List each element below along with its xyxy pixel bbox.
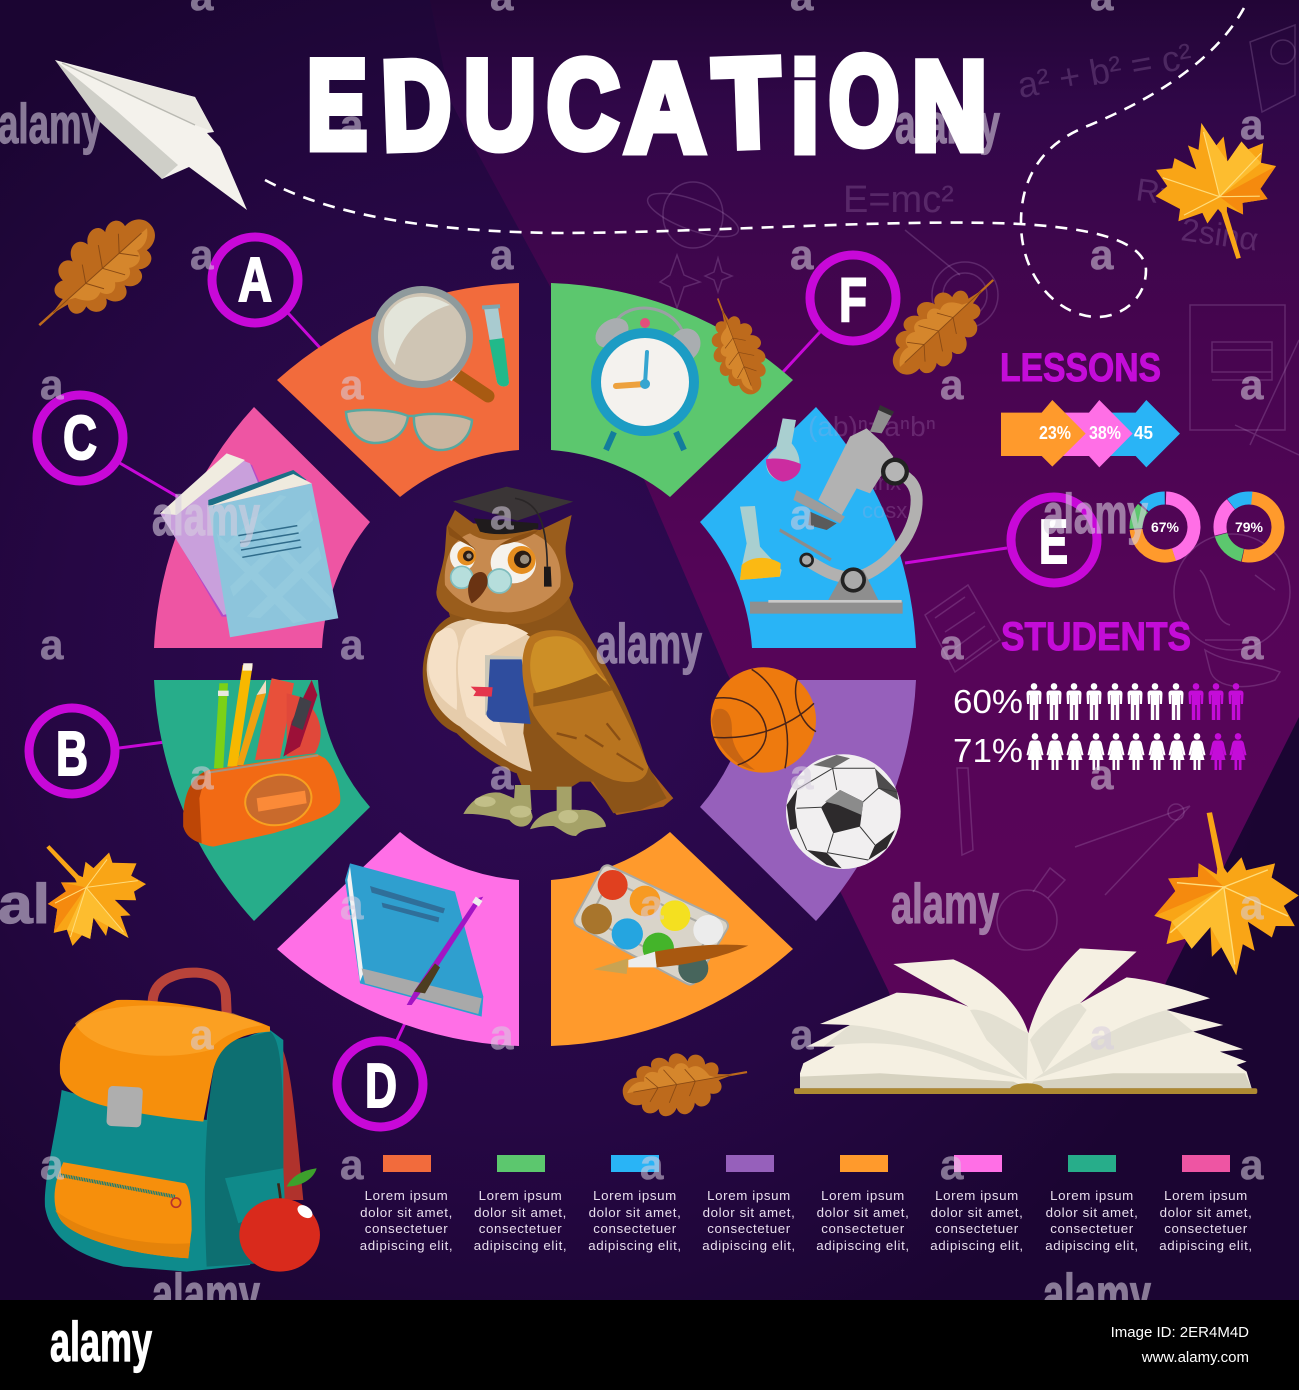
watermarks: a [640, 1141, 664, 1188]
watermarks: a [490, 231, 514, 278]
chart: students female row 71% [953, 732, 1246, 770]
icon: notebooks [160, 453, 338, 637]
chart: students male row 60%: 60% [953, 683, 1023, 720]
title: U [464, 36, 536, 175]
watermarks: a [340, 1141, 364, 1188]
legend item orange-red: Lorem ipsum [365, 1188, 448, 1203]
watermarks: a [1090, 751, 1114, 798]
title: C [545, 34, 621, 175]
watermarks: a [1240, 621, 1264, 668]
legend item blue: Lorem ipsum [593, 1188, 677, 1203]
icon: magnifying glass [371, 286, 488, 396]
chalk doodles background: R= [1134, 171, 1180, 213]
watermarks: a [790, 231, 814, 278]
legend item blue: adipiscing elit, [588, 1238, 682, 1253]
legend item teal: adipiscing elit, [1045, 1238, 1139, 1253]
label ring C: C [63, 404, 97, 473]
watermarks: a [40, 621, 64, 668]
panel: segment orange [551, 832, 793, 1046]
icon: microscope and flasks [740, 405, 917, 614]
watermarks: a [40, 361, 64, 408]
label ring F: F [839, 266, 867, 335]
chart: donut 67% [1124, 486, 1206, 568]
legend item purple: consectetuer [707, 1221, 791, 1236]
watermarks: alamy [0, 92, 102, 155]
icon: blue book [345, 863, 483, 1017]
legend item teal: dolor sit amet, [1046, 1205, 1138, 1220]
icon: oak leaf on clock panel [694, 289, 778, 403]
panel: segment D magenta [277, 832, 519, 1046]
legend item green: adipiscing elit, [474, 1238, 567, 1253]
legend item magenta: Lorem ipsum [935, 1188, 1019, 1203]
label ring B [29, 708, 115, 794]
chart: donut 67%: 67% [1151, 519, 1180, 535]
panel: segment C pink [154, 407, 370, 648]
watermarks: a [40, 1141, 64, 1188]
label ring E [1011, 497, 1097, 583]
label ring F [810, 255, 896, 341]
watermarks: a [940, 361, 964, 408]
label ring A [212, 237, 298, 323]
owl book [485, 655, 530, 723]
watermarks: a [1240, 1141, 1264, 1188]
owl eyes [450, 541, 475, 571]
chart: donut 79%: 79% [1235, 519, 1264, 535]
watermarks: a [790, 751, 814, 798]
watermarks: a [1240, 101, 1264, 148]
doodle formula over blue panel: sinx [862, 470, 901, 495]
owl glasses [451, 566, 473, 588]
legend item blue [588, 1155, 682, 1253]
legend item orange-red: dolor sit amet, [360, 1205, 453, 1220]
icon: oak leaf top left [15, 198, 175, 352]
stock photo footer bar: www.alamy.com [1141, 1349, 1249, 1366]
icon: maple leaf top right [1141, 108, 1296, 274]
chalk doodles background: E=mc² [843, 179, 954, 221]
title [307, 32, 987, 178]
watermarks: a [340, 621, 364, 668]
watermarks: a [1240, 881, 1264, 928]
legend item blue: consectetuer [593, 1221, 677, 1236]
watermarks: alamy [891, 872, 999, 935]
legend item teal: Lorem ipsum [1050, 1188, 1134, 1203]
chalk doodles background: a² + b² = c² [1014, 35, 1195, 106]
watermarks: a [1090, 1011, 1114, 1058]
legend item green: Lorem ipsum [479, 1188, 562, 1203]
owl legs and feet [463, 785, 606, 836]
legend item pink: Lorem ipsum [1164, 1188, 1248, 1203]
legend item orange [816, 1155, 910, 1253]
doodle formula over blue panel: (ab)ⁿ=aⁿbⁿ [808, 411, 936, 442]
watermarks: a [190, 751, 214, 798]
watermarks: a [940, 1141, 964, 1188]
watermarks: a [190, 1011, 214, 1058]
panel: segment E blue [700, 407, 916, 648]
legend item pink: adipiscing elit, [1159, 1238, 1253, 1253]
watermarks: a [1090, 231, 1114, 278]
watermarks: a [940, 621, 964, 668]
panel: segment F green [551, 283, 793, 497]
stock photo footer bar: Image ID: 2ER4M4D [1111, 1324, 1249, 1341]
label ring E: E [1039, 508, 1068, 577]
icon: oak leaf right [875, 256, 1015, 394]
watermarks: a [790, 491, 814, 538]
icon: test tube [482, 304, 509, 386]
panel: segment B teal [154, 680, 370, 921]
watermarks: alamy [895, 92, 1000, 155]
owl head [436, 510, 573, 624]
chart: donut 79% [1208, 486, 1290, 568]
chalk doodles background [643, 25, 1299, 950]
watermarks: a [640, 881, 664, 928]
legend item purple: dolor sit amet, [703, 1205, 795, 1220]
owl wing [522, 630, 648, 782]
watermarks: a [490, 1011, 514, 1058]
legend item green: dolor sit amet, [474, 1205, 567, 1220]
legend item purple: adipiscing elit, [702, 1238, 796, 1253]
legend item orange-red: consectetuer [365, 1221, 448, 1236]
watermarks: a [1240, 361, 1264, 408]
legend item pink: consectetuer [1164, 1221, 1248, 1236]
label ring D [337, 1041, 423, 1127]
chart: students male row 60% [953, 683, 1244, 720]
legend item orange-red [360, 1155, 453, 1253]
legend item orange: Lorem ipsum [821, 1188, 905, 1203]
doodle formula over blue panel [808, 411, 936, 523]
stock photo footer bar [0, 1300, 1299, 1390]
watermarks: alamy [1043, 482, 1148, 545]
owl face [445, 533, 561, 612]
watermarks: a [340, 881, 364, 928]
chart: lessons arrows: 38% [1089, 423, 1121, 443]
watermarks: alamy [1043, 1262, 1151, 1325]
icon: eyeglasses [346, 410, 472, 450]
heading: students: STUDENTS [1001, 615, 1191, 659]
watermarks: alamy [152, 484, 260, 547]
legend item purple [702, 1155, 796, 1253]
chalk doodles background: 2sinα [1179, 211, 1260, 258]
owl body [423, 583, 667, 813]
connector lines [118, 313, 1007, 1040]
watermarks: a [340, 101, 364, 148]
chart: lessons arrows: 23% [1039, 423, 1071, 443]
owl beak [468, 572, 488, 603]
legend item teal: consectetuer [1050, 1221, 1134, 1236]
legend item pink: dolor sit amet, [1160, 1205, 1252, 1220]
watermarks: a [340, 361, 364, 408]
label ring C [37, 395, 123, 481]
legend item orange: adipiscing elit, [816, 1238, 910, 1253]
icon: backpack with apple [45, 973, 320, 1272]
icon: soccer ball [786, 754, 901, 869]
owl belly [427, 618, 532, 772]
icon: pencil case [183, 663, 340, 847]
legend item magenta: dolor sit amet, [931, 1205, 1023, 1220]
watermarks: alamy [152, 1262, 260, 1325]
stock photo footer bar: alamy [50, 1310, 152, 1373]
icon: wise owl with cap, glasses and book [423, 487, 673, 836]
icon: maple leaf left [9, 810, 170, 973]
title: N [912, 37, 987, 176]
chart: students female row 71%: 71% [953, 732, 1023, 769]
legend item magenta: consectetuer [935, 1221, 1019, 1236]
legend item blue: dolor sit amet, [589, 1205, 681, 1220]
label ring D: D [365, 1052, 397, 1121]
legend item teal [1045, 1155, 1139, 1253]
doodle formula over blue panel: cosx [862, 498, 907, 523]
heading: lessons: LESSONS [1000, 346, 1161, 390]
watermarks: a [490, 751, 514, 798]
legend item orange: consectetuer [821, 1221, 905, 1236]
icon: open book [794, 948, 1257, 1094]
owl brows [447, 525, 538, 557]
legend item pink [1159, 1155, 1253, 1253]
chart: lessons arrows: 45 [1134, 423, 1153, 443]
chart: lessons arrows [1001, 400, 1180, 467]
legend item orange: dolor sit amet, [817, 1205, 909, 1220]
owl tail [587, 770, 673, 815]
icon: paper plane [55, 60, 247, 210]
icon: watercolor palette and brush [581, 870, 748, 983]
label ring A: A [238, 246, 272, 315]
label ring B: B [56, 720, 88, 789]
icon: maple leaf right [1141, 802, 1299, 985]
panel: segment A orange-red [277, 283, 519, 497]
legend item green: consectetuer [479, 1221, 562, 1236]
legend item orange-red: adipiscing elit, [360, 1238, 453, 1253]
legend item purple: Lorem ipsum [707, 1188, 791, 1203]
title: O [829, 32, 899, 171]
title: D [380, 35, 453, 176]
legend item magenta: adipiscing elit, [930, 1238, 1024, 1253]
legend item magenta [930, 1155, 1024, 1253]
watermarks: alamy [596, 612, 702, 675]
title: E [307, 36, 367, 175]
title: A [625, 39, 705, 178]
watermarks: a [490, 491, 514, 538]
graduation cap [474, 518, 538, 534]
icon: basketball [711, 667, 816, 773]
title: T [712, 33, 782, 174]
panel: segment purple [700, 680, 916, 921]
icon: oak leaf bottom [618, 1042, 752, 1124]
icon: alarm clock [590, 308, 706, 450]
legend item green [474, 1155, 567, 1253]
watermarks: a [190, 231, 214, 278]
watermarks: a [790, 1011, 814, 1058]
title: i [791, 39, 819, 178]
dashed flight path [265, 0, 1248, 317]
